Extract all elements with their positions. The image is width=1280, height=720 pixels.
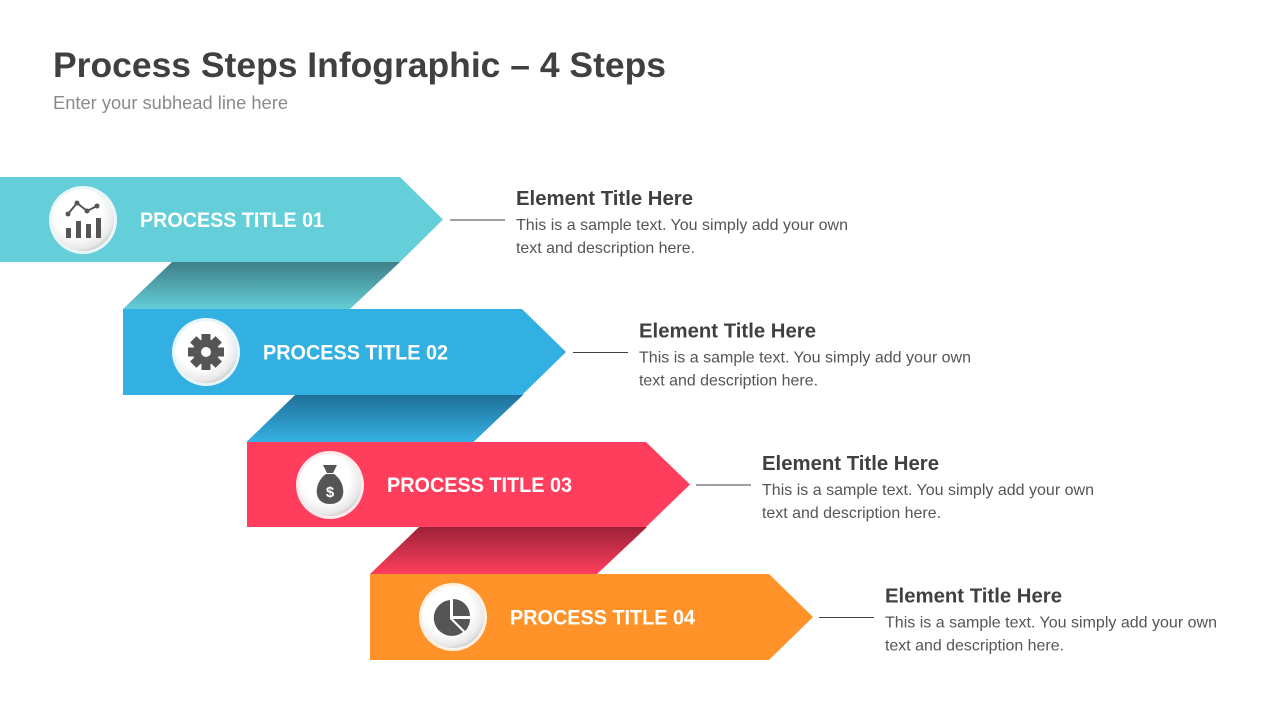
description 2: text and description here. (639, 372, 818, 390)
icon: money bag (296, 451, 364, 519)
description 2 (639, 320, 971, 390)
arrow 3 (247, 442, 690, 527)
arrow 4 (370, 574, 813, 660)
subhead: Enter your subhead line here (53, 93, 288, 113)
icon: pie chart (419, 583, 487, 651)
process title 3: PROCESS TITLE 03 (387, 474, 572, 497)
process title 4: PROCESS TITLE 04 (510, 606, 695, 630)
description 1: Element Title Here (516, 188, 693, 210)
description 3: text and description here. (762, 505, 941, 522)
title: Process Steps Infographic – 4 Steps (53, 46, 666, 85)
connector 2 (246, 394, 524, 442)
step 2 (123, 309, 971, 395)
description 1: This is a sample text. You simply add your own (516, 217, 848, 234)
step 4 (370, 574, 1217, 660)
icon: chart (49, 186, 117, 254)
description 1 (516, 188, 848, 257)
process title 2: PROCESS TITLE 02 (263, 342, 448, 364)
arrow 1 (0, 177, 443, 262)
connector 1 (123, 262, 400, 309)
description 1: text and description here. (516, 240, 695, 257)
description 4 (885, 586, 1217, 654)
arrow 2 (123, 309, 566, 395)
description 4: Element Title Here (885, 586, 1062, 608)
step 3 (247, 442, 1094, 527)
description 2: Element Title Here (639, 320, 816, 342)
description 3: This is a sample text. You simply add your own (762, 482, 1094, 499)
icon: gear (172, 318, 240, 386)
process title 1: PROCESS TITLE 01 (140, 209, 324, 232)
step 1 (0, 177, 848, 262)
description 3: Element Title Here (762, 453, 939, 475)
description 4: text and description here. (885, 638, 1064, 654)
description 3 (762, 453, 1094, 522)
connector 3 (370, 527, 647, 574)
icon: money bag: $ (326, 484, 335, 501)
description 4: This is a sample text. You simply add your own (885, 614, 1217, 632)
description 2: This is a sample text. You simply add your own (639, 350, 971, 366)
